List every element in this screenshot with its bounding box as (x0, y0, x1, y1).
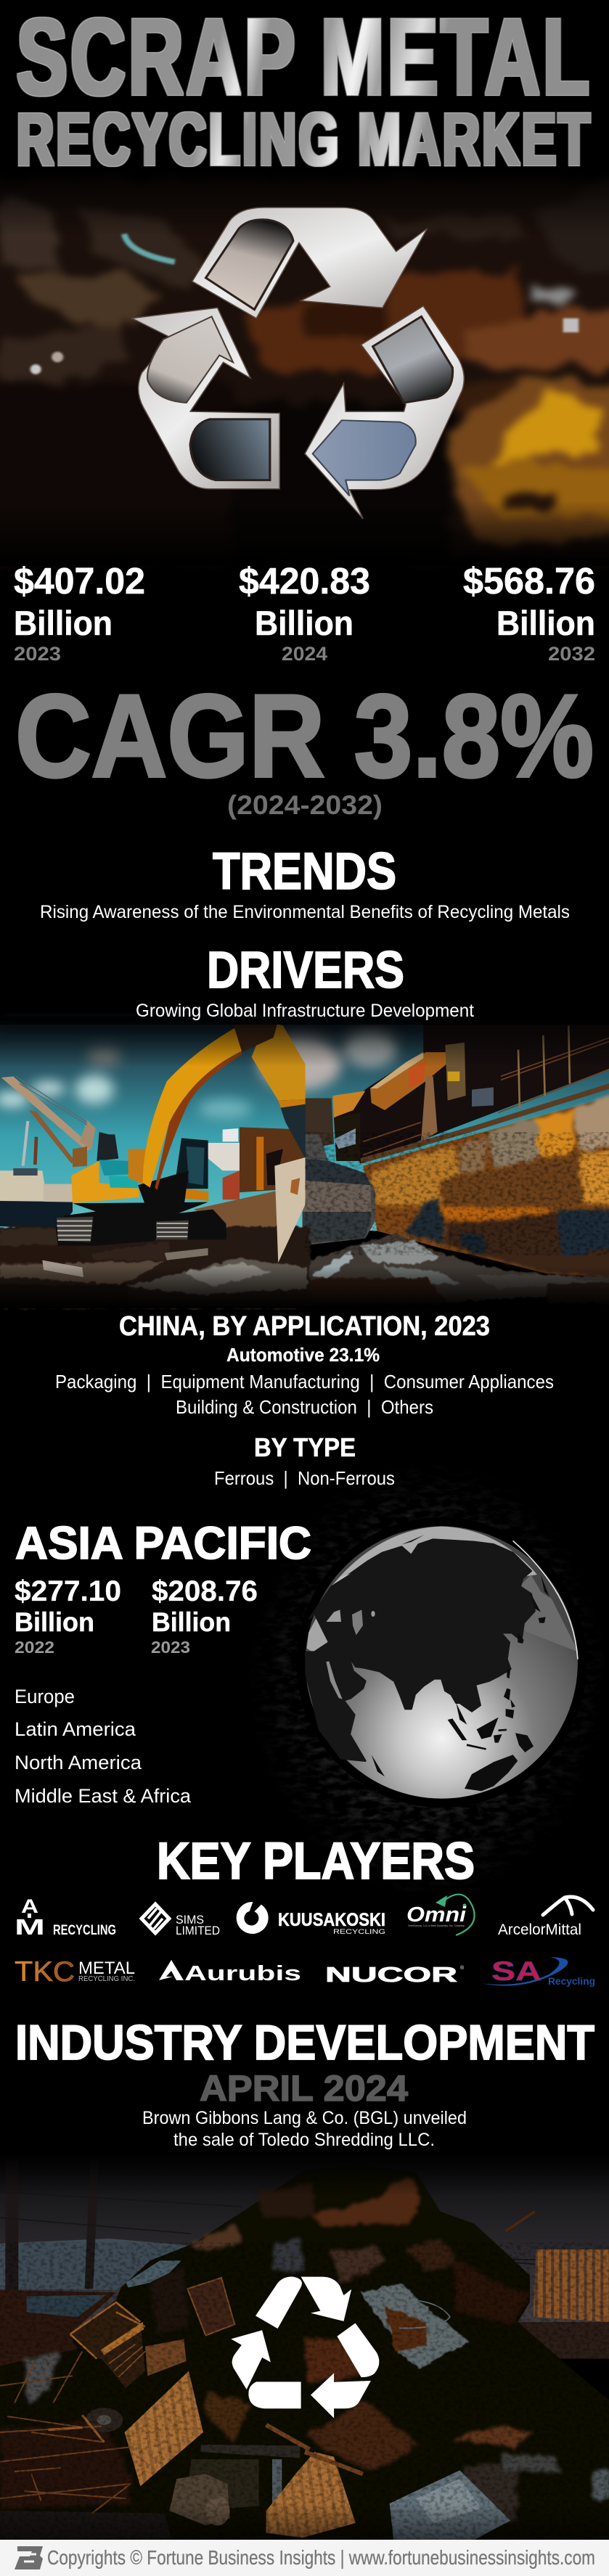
boom (143, 1028, 245, 1188)
logo: Sims Limited (142, 1904, 220, 1937)
stat: 2032 market size: Billion (496, 604, 595, 642)
stat: 2032 market size: 2032 (548, 643, 595, 665)
trends: TRENDS (213, 843, 396, 901)
stat: 2024 market size: $420.83 (239, 560, 370, 602)
footer (0, 2540, 609, 2576)
industry development: Brown Gibbons Lang & Co. (BGL) unveiled (142, 2108, 467, 2128)
drivers: DRIVERS (207, 942, 404, 999)
list of other regions: Middle East & Africa (15, 1785, 192, 1807)
left arrow (132, 308, 279, 489)
industry development: the sale of Toledo Shredding LLC. (173, 2130, 435, 2150)
industry development: APRIL 2024 (200, 2068, 408, 2109)
heading: China by application: Automotive 23.1% (226, 1344, 380, 1366)
photo: blurred scrap yard behind title (0, 163, 609, 566)
heading: by type (214, 1432, 395, 1489)
logo: Kuusakoski Recycling (237, 1903, 385, 1936)
logo: AIM Recycling: RECYCLING (53, 1923, 116, 1938)
logo: ArcelorMittal: ArcelorMittal (498, 1921, 581, 1938)
heading: by type: BY TYPE (254, 1432, 356, 1462)
CAGR: (2024-2032) (227, 790, 383, 820)
list of other regions: Europe (15, 1686, 75, 1707)
list of other regions: Latin America (15, 1718, 136, 1740)
industry development (15, 2015, 594, 2150)
bucket edge (274, 1157, 306, 1263)
stat: 2023 market size (14, 560, 145, 665)
logo: TKC Metal Recycling: METAL (78, 1958, 135, 1978)
logo: TKC Metal Recycling (15, 1956, 135, 1988)
title (17, 0, 592, 181)
left crane (1, 1076, 92, 1152)
left ship (0, 1170, 47, 1201)
logo: Aurubis: Aurubis (184, 1962, 301, 1985)
stat: 2023 market size: Billion (14, 604, 113, 642)
heading: by type: Ferrous | Non-Ferrous (214, 1467, 395, 1489)
list of other regions: North America (15, 1752, 142, 1773)
drivers (136, 942, 474, 1021)
logo: Sims Limited: SIMS (176, 1913, 204, 1927)
land masses (306, 1540, 535, 1761)
logo: Aurubis (159, 1960, 301, 1985)
heading: China by application: Packaging | Equipment Manufacturing | Consumer Appliances (55, 1371, 554, 1392)
heading: China by application (55, 1311, 554, 1418)
logo: Omni: OmniSource, LLC a Steel Dynamics, Inc. Company (408, 1924, 465, 1927)
stat: Asia Pacific 2022 (15, 1575, 121, 1657)
logo: AIM Recycling: A (21, 1895, 38, 1917)
logo: Sims Limited: LIMITED (176, 1924, 220, 1937)
stat: 2024 market size: Billion (255, 604, 353, 642)
trends: Rising Awareness of the Environmental Benefits of Recycling Metals (40, 902, 570, 922)
icon: Fortune Business Insights logo (15, 2546, 43, 2569)
icon: white recycling symbol (231, 2277, 379, 2418)
logo: ArcelorMittal (498, 1897, 593, 1938)
stat: Asia Pacific 2023 (151, 1575, 258, 1657)
heading: China by application: Building & Construction | Others (176, 1396, 433, 1418)
list of other regions (15, 1686, 192, 1807)
photo: excavator at ship breaking yard (0, 1016, 609, 1308)
stat: 2032 market size: $568.76 (463, 560, 595, 602)
logo: Nucor (325, 1964, 465, 1987)
drivers: Growing Global Infrastructure Development (136, 1001, 474, 1021)
excavator body (73, 1202, 208, 1217)
stat: 2024 market size (239, 560, 370, 665)
logo: Omni (406, 1895, 475, 1935)
mid ship (208, 1143, 247, 1170)
stat: 2032 market size (463, 560, 595, 665)
logo: TKC Metal Recycling: TKC (15, 1956, 75, 1988)
logo: Nucor: NUCOR (325, 1964, 457, 1987)
logo: AIM Recycling (15, 1895, 116, 1940)
stat: 2023 market size: 2023 (14, 643, 61, 665)
tracks (56, 1208, 167, 1246)
logo: SA Recycling: SA (491, 1956, 541, 1986)
logo: Nucor: ® (460, 1965, 465, 1971)
top arrow (192, 208, 427, 319)
heading: China by application: CHINA, BY APPLICATION, 2023 (119, 1311, 490, 1342)
stat: Asia Pacific 2022: 2022 (15, 1638, 54, 1657)
logo: Kuusakoski Recycling: RECYCLING (333, 1928, 385, 1936)
stat: Asia Pacific 2022: Billion (15, 1607, 94, 1637)
heap silhouette (0, 2165, 609, 2548)
right container (534, 2249, 609, 2322)
logo: SA Recycling (481, 1956, 595, 1987)
stat: Asia Pacific 2022: $277.10 (15, 1575, 121, 1607)
logo: TKC Metal Recycling: RECYCLING INC. (78, 1975, 135, 1983)
trends (40, 843, 570, 922)
logo: SA Recycling: Recycling (548, 1975, 595, 1987)
logo: AIM Recycling: M (15, 1914, 45, 1940)
stat: Asia Pacific 2023: 2023 (151, 1638, 190, 1657)
logo: Omni: Omni (406, 1903, 467, 1927)
logo: Kuusakoski Recycling: KUUSAKOSKI (278, 1910, 385, 1930)
right arrow (305, 306, 464, 519)
stat: Asia Pacific 2023: $208.76 (152, 1575, 258, 1607)
stat: Asia Pacific 2023: Billion (152, 1607, 231, 1637)
stat: 2024 market size: 2024 (282, 643, 327, 665)
photo: scrap heap (0, 2152, 609, 2548)
heading: key players: KEY PLAYERS (157, 1833, 475, 1890)
globe (296, 1517, 586, 1808)
icon: metal recycling symbol (132, 208, 464, 519)
regional heading: Asia Pacific: ASIA PACIFIC (15, 1518, 311, 1569)
stat: 2023 market size: $407.02 (14, 560, 145, 602)
scratched metal texture behind globe (263, 1486, 587, 1872)
ground (0, 1226, 310, 1308)
